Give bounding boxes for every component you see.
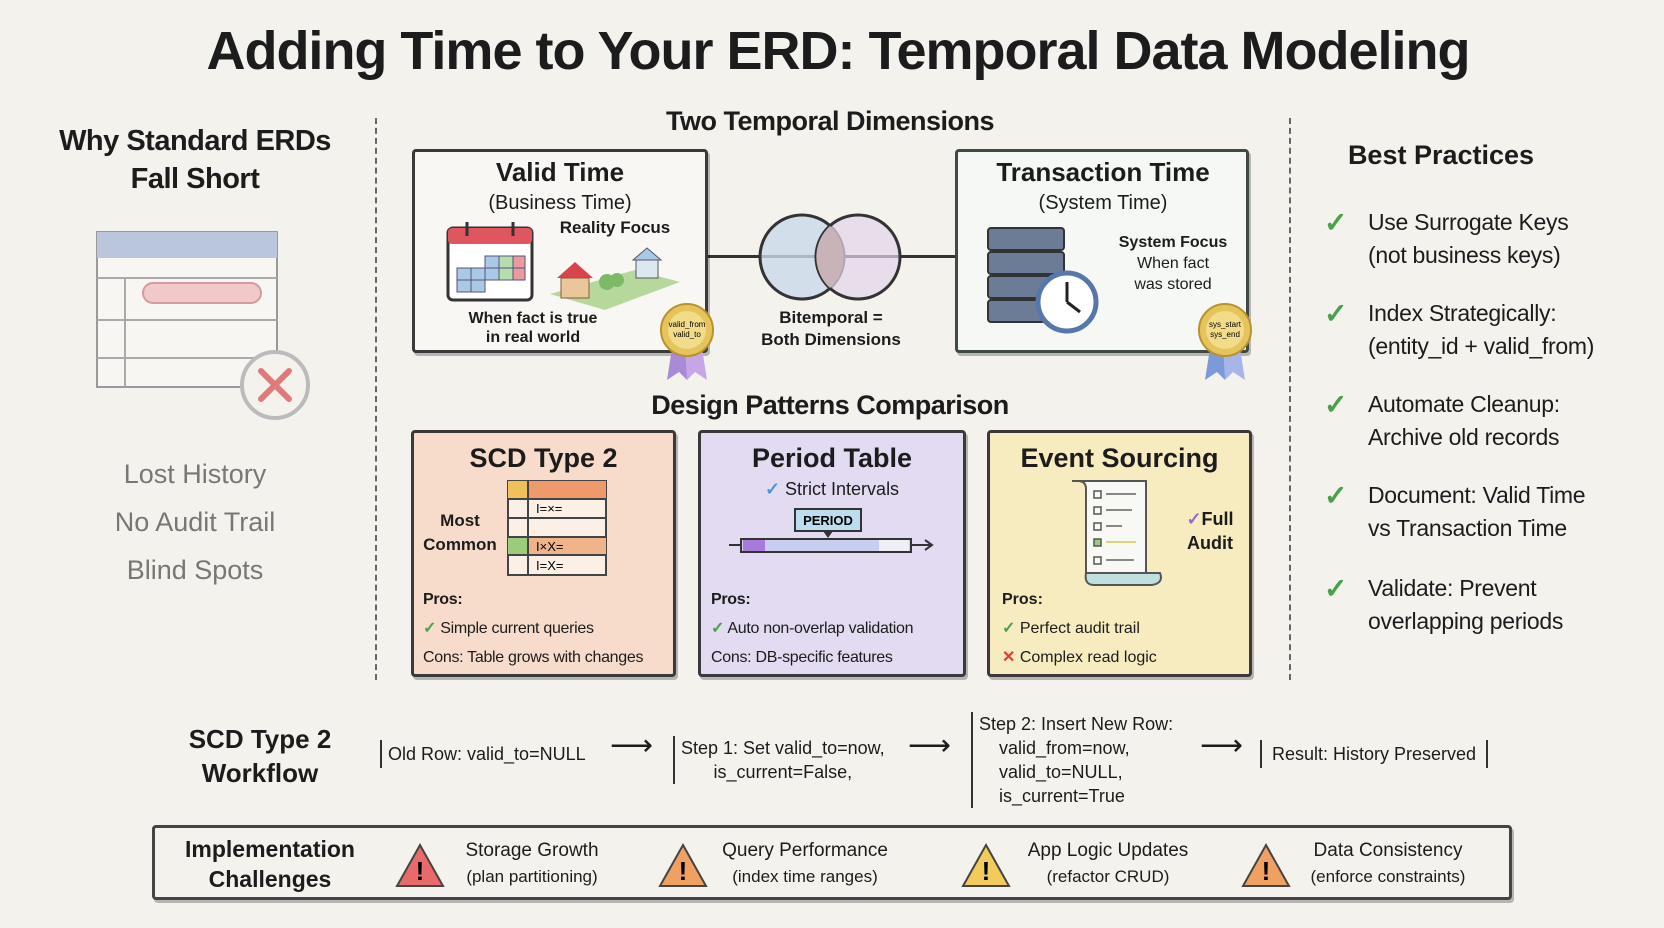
step: step 1: Step 1: Set valid_to=now, bbox=[681, 738, 885, 758]
heading: why standard ERDs: Fall Short bbox=[131, 163, 259, 195]
panel: SCD type 2 bbox=[411, 430, 676, 677]
panel: best practices: Archive old records bbox=[1368, 424, 1559, 450]
heading: SCD type 2 workflow: Workflow bbox=[202, 758, 318, 788]
text: system focus: When fact bbox=[1137, 255, 1209, 272]
panel: best practices: (not business keys) bbox=[1368, 242, 1560, 268]
panel: best practices: Index Strategically: bbox=[1368, 300, 1556, 326]
step: step 2: valid_from=now, bbox=[999, 738, 1130, 758]
label: reality focus: Reality Focus bbox=[560, 218, 670, 237]
step: result: Result: History Preserved bbox=[1272, 744, 1476, 764]
text: bitemporal bbox=[761, 308, 901, 349]
challenge: storage growth bbox=[395, 840, 599, 887]
heading: two temporal dimensions: Two Temporal Dimensions bbox=[666, 106, 994, 136]
text: pros and cons: ✓ Simple current queries bbox=[423, 620, 594, 637]
heading: implementation challenges: Implementation bbox=[185, 836, 355, 862]
icon: badge valid_from: valid_to bbox=[673, 330, 701, 339]
challenge: data consistency: ! bbox=[1262, 856, 1270, 886]
step: step 2: Step 2: Insert New Row: bbox=[979, 714, 1173, 734]
heading: best practices: Best Practices bbox=[1348, 140, 1534, 170]
text: bitemporal: Both Dimensions bbox=[761, 330, 901, 349]
heading: transaction time: Transaction Time bbox=[996, 157, 1210, 187]
arrow: ⟶ bbox=[908, 729, 951, 762]
text: system focus: was stored bbox=[1134, 276, 1212, 293]
label: most common: Most bbox=[440, 511, 480, 530]
text: pros and cons: Cons: Table grows with changes bbox=[423, 649, 643, 666]
panel: why standard ERDs fall short bbox=[59, 125, 331, 585]
panel: best practices: ✓ bbox=[1324, 389, 1347, 420]
label: most common bbox=[423, 511, 497, 554]
label: most common: Common bbox=[423, 535, 497, 554]
step: step 1 bbox=[673, 736, 891, 784]
step: old row: Old Row: valid_to=NULL bbox=[388, 744, 586, 764]
text: when fact is true bbox=[468, 310, 597, 346]
connector lines bbox=[708, 255, 958, 258]
panel: event sourcing bbox=[987, 430, 1252, 677]
challenge: app logic updates: ! bbox=[982, 856, 990, 886]
step: step 2: is_current=True bbox=[999, 786, 1125, 806]
icon: period timeline: PERIOD bbox=[803, 513, 853, 528]
panel: best practices: (entity_id + valid_from) bbox=[1368, 333, 1594, 359]
text: when fact is true: When fact is true bbox=[469, 310, 597, 327]
challenge: query performance: ! bbox=[679, 856, 687, 886]
panel: best practices: ✓ bbox=[1324, 207, 1347, 238]
icon: badge sys_start bbox=[1198, 303, 1252, 380]
step: step 2 bbox=[971, 712, 1179, 808]
text: system focus bbox=[1119, 234, 1227, 293]
text: pros and cons: ✓ Perfect audit trail bbox=[1002, 620, 1140, 637]
challenge: query performance: Query Performance bbox=[722, 840, 888, 861]
icon: calendar bbox=[446, 222, 534, 302]
heading: valid time bbox=[488, 157, 632, 214]
text: when fact is true: in real world bbox=[486, 329, 580, 346]
text: problems list: Blind Spots bbox=[127, 555, 263, 585]
icon: history table: I=X= bbox=[536, 558, 563, 573]
text: problems list: No Audit Trail bbox=[115, 507, 275, 537]
text: full audit bbox=[1186, 509, 1234, 553]
list: practices bbox=[1324, 207, 1594, 634]
panel: implementation challenges bbox=[152, 825, 1512, 900]
heading: implementation challenges bbox=[185, 836, 355, 892]
heading: valid time: Valid Time bbox=[496, 157, 624, 187]
challenge: storage growth: (plan partitioning) bbox=[466, 867, 598, 886]
challenge: query performance: (index time ranges) bbox=[732, 867, 878, 886]
panel: period table bbox=[698, 430, 966, 677]
icon: history table bbox=[507, 480, 607, 576]
icon: history table: I=×= bbox=[536, 501, 562, 516]
text: pros and cons: Pros: bbox=[1002, 591, 1043, 608]
challenge: storage growth: Storage Growth bbox=[465, 840, 599, 861]
step: old row bbox=[380, 740, 592, 768]
heading: SCD type 2: SCD Type 2 bbox=[469, 443, 618, 473]
left dashed divider bbox=[375, 118, 377, 680]
icon: server with clock bbox=[987, 227, 1098, 334]
icon: badge valid_from bbox=[660, 303, 714, 380]
icon: badge sys_start: sys_start bbox=[1209, 320, 1242, 329]
text: strict intervals: ✓ Strict Intervals bbox=[765, 479, 899, 499]
panel: best practices bbox=[1324, 140, 1594, 634]
text: pros and cons: Pros: bbox=[423, 591, 462, 608]
text: pros and cons bbox=[1002, 591, 1157, 666]
icon: badge sys_start: sys_end bbox=[1210, 330, 1240, 339]
heading: SCD type 2 workflow: SCD Type 2 bbox=[189, 724, 331, 754]
panel: best practices: ✓ bbox=[1324, 298, 1347, 329]
text: system focus: System Focus bbox=[1119, 234, 1227, 251]
icon: venn diagram bbox=[758, 214, 902, 300]
heading: period table: Period Table bbox=[752, 443, 912, 473]
right dashed divider bbox=[1289, 118, 1291, 680]
text: pros and cons: ✕ Complex read logic bbox=[1002, 649, 1157, 666]
panel: best practices: Automate Cleanup: bbox=[1368, 391, 1560, 417]
title: Adding Time to Your ERD: Temporal Data Modeling bbox=[206, 21, 1470, 81]
panel: best practices: vs Transaction Time bbox=[1368, 515, 1567, 541]
panel: best practices: Validate: Prevent bbox=[1368, 575, 1536, 601]
text: full audit: Audit bbox=[1187, 533, 1233, 553]
icon: period timeline bbox=[729, 508, 934, 553]
icon: history table: I×X= bbox=[536, 539, 563, 554]
arrow: ⟶ bbox=[1200, 729, 1243, 762]
heading: valid time: (Business Time) bbox=[488, 192, 632, 214]
challenge: data consistency: Data Consistency bbox=[1314, 840, 1462, 861]
text: pros and cons bbox=[423, 591, 643, 666]
panel: best practices: Use Surrogate Keys bbox=[1368, 209, 1568, 235]
challenge: data consistency: (enforce constraints) bbox=[1311, 867, 1465, 886]
challenge: app logic updates: App Logic Updates bbox=[1028, 840, 1188, 861]
heading: SCD type 2 workflow bbox=[189, 724, 331, 788]
panel: best practices: ✓ bbox=[1324, 480, 1347, 511]
challenge: query performance bbox=[658, 840, 888, 887]
text: bitemporal: Bitemporal = bbox=[779, 308, 883, 327]
text: pros and cons bbox=[711, 591, 913, 666]
panel: valid time bbox=[412, 149, 708, 353]
heading: why standard ERDs bbox=[59, 125, 331, 195]
panel: transaction time bbox=[955, 149, 1249, 353]
text: pros and cons: ✓ Auto non-overlap validation bbox=[711, 620, 913, 637]
text: full audit: ✓Full bbox=[1186, 509, 1234, 529]
icon: audit scroll bbox=[1072, 480, 1162, 586]
heading: implementation challenges: Challenges bbox=[209, 866, 331, 892]
challenge: app logic updates: (refactor CRUD) bbox=[1047, 867, 1169, 886]
heading: design patterns comparison: Design Patterns Comparison bbox=[651, 390, 1009, 420]
heading: transaction time: (System Time) bbox=[1039, 192, 1167, 214]
text: problems list: Lost History bbox=[124, 459, 266, 489]
text: problems list bbox=[115, 459, 275, 585]
heading: why standard ERDs: Why Standard ERDs bbox=[59, 125, 331, 157]
heading: transaction time bbox=[996, 157, 1210, 214]
step: step 1: is_current=False, bbox=[714, 762, 852, 782]
panel: best practices: ✓ bbox=[1324, 573, 1347, 604]
panel: best practices: Document: Valid Time bbox=[1368, 482, 1585, 508]
heading: event sourcing: Event Sourcing bbox=[1020, 443, 1219, 473]
step: result bbox=[1260, 740, 1488, 768]
icon: houses bbox=[550, 248, 680, 310]
text: pros and cons: Pros: bbox=[711, 591, 750, 608]
arrow: ⟶ bbox=[610, 729, 653, 762]
challenge: data consistency bbox=[1241, 840, 1465, 887]
challenge: app logic updates bbox=[961, 840, 1188, 887]
icon: broken table bbox=[96, 231, 310, 420]
text: pros and cons: Cons: DB-specific features bbox=[711, 649, 893, 666]
icon: badge valid_from: valid_from bbox=[669, 320, 706, 329]
panel: best practices: overlapping periods bbox=[1368, 608, 1563, 634]
workflow steps bbox=[380, 712, 1488, 808]
challenge: storage growth: ! bbox=[416, 856, 424, 886]
step: step 2: valid_to=NULL, bbox=[999, 762, 1123, 782]
